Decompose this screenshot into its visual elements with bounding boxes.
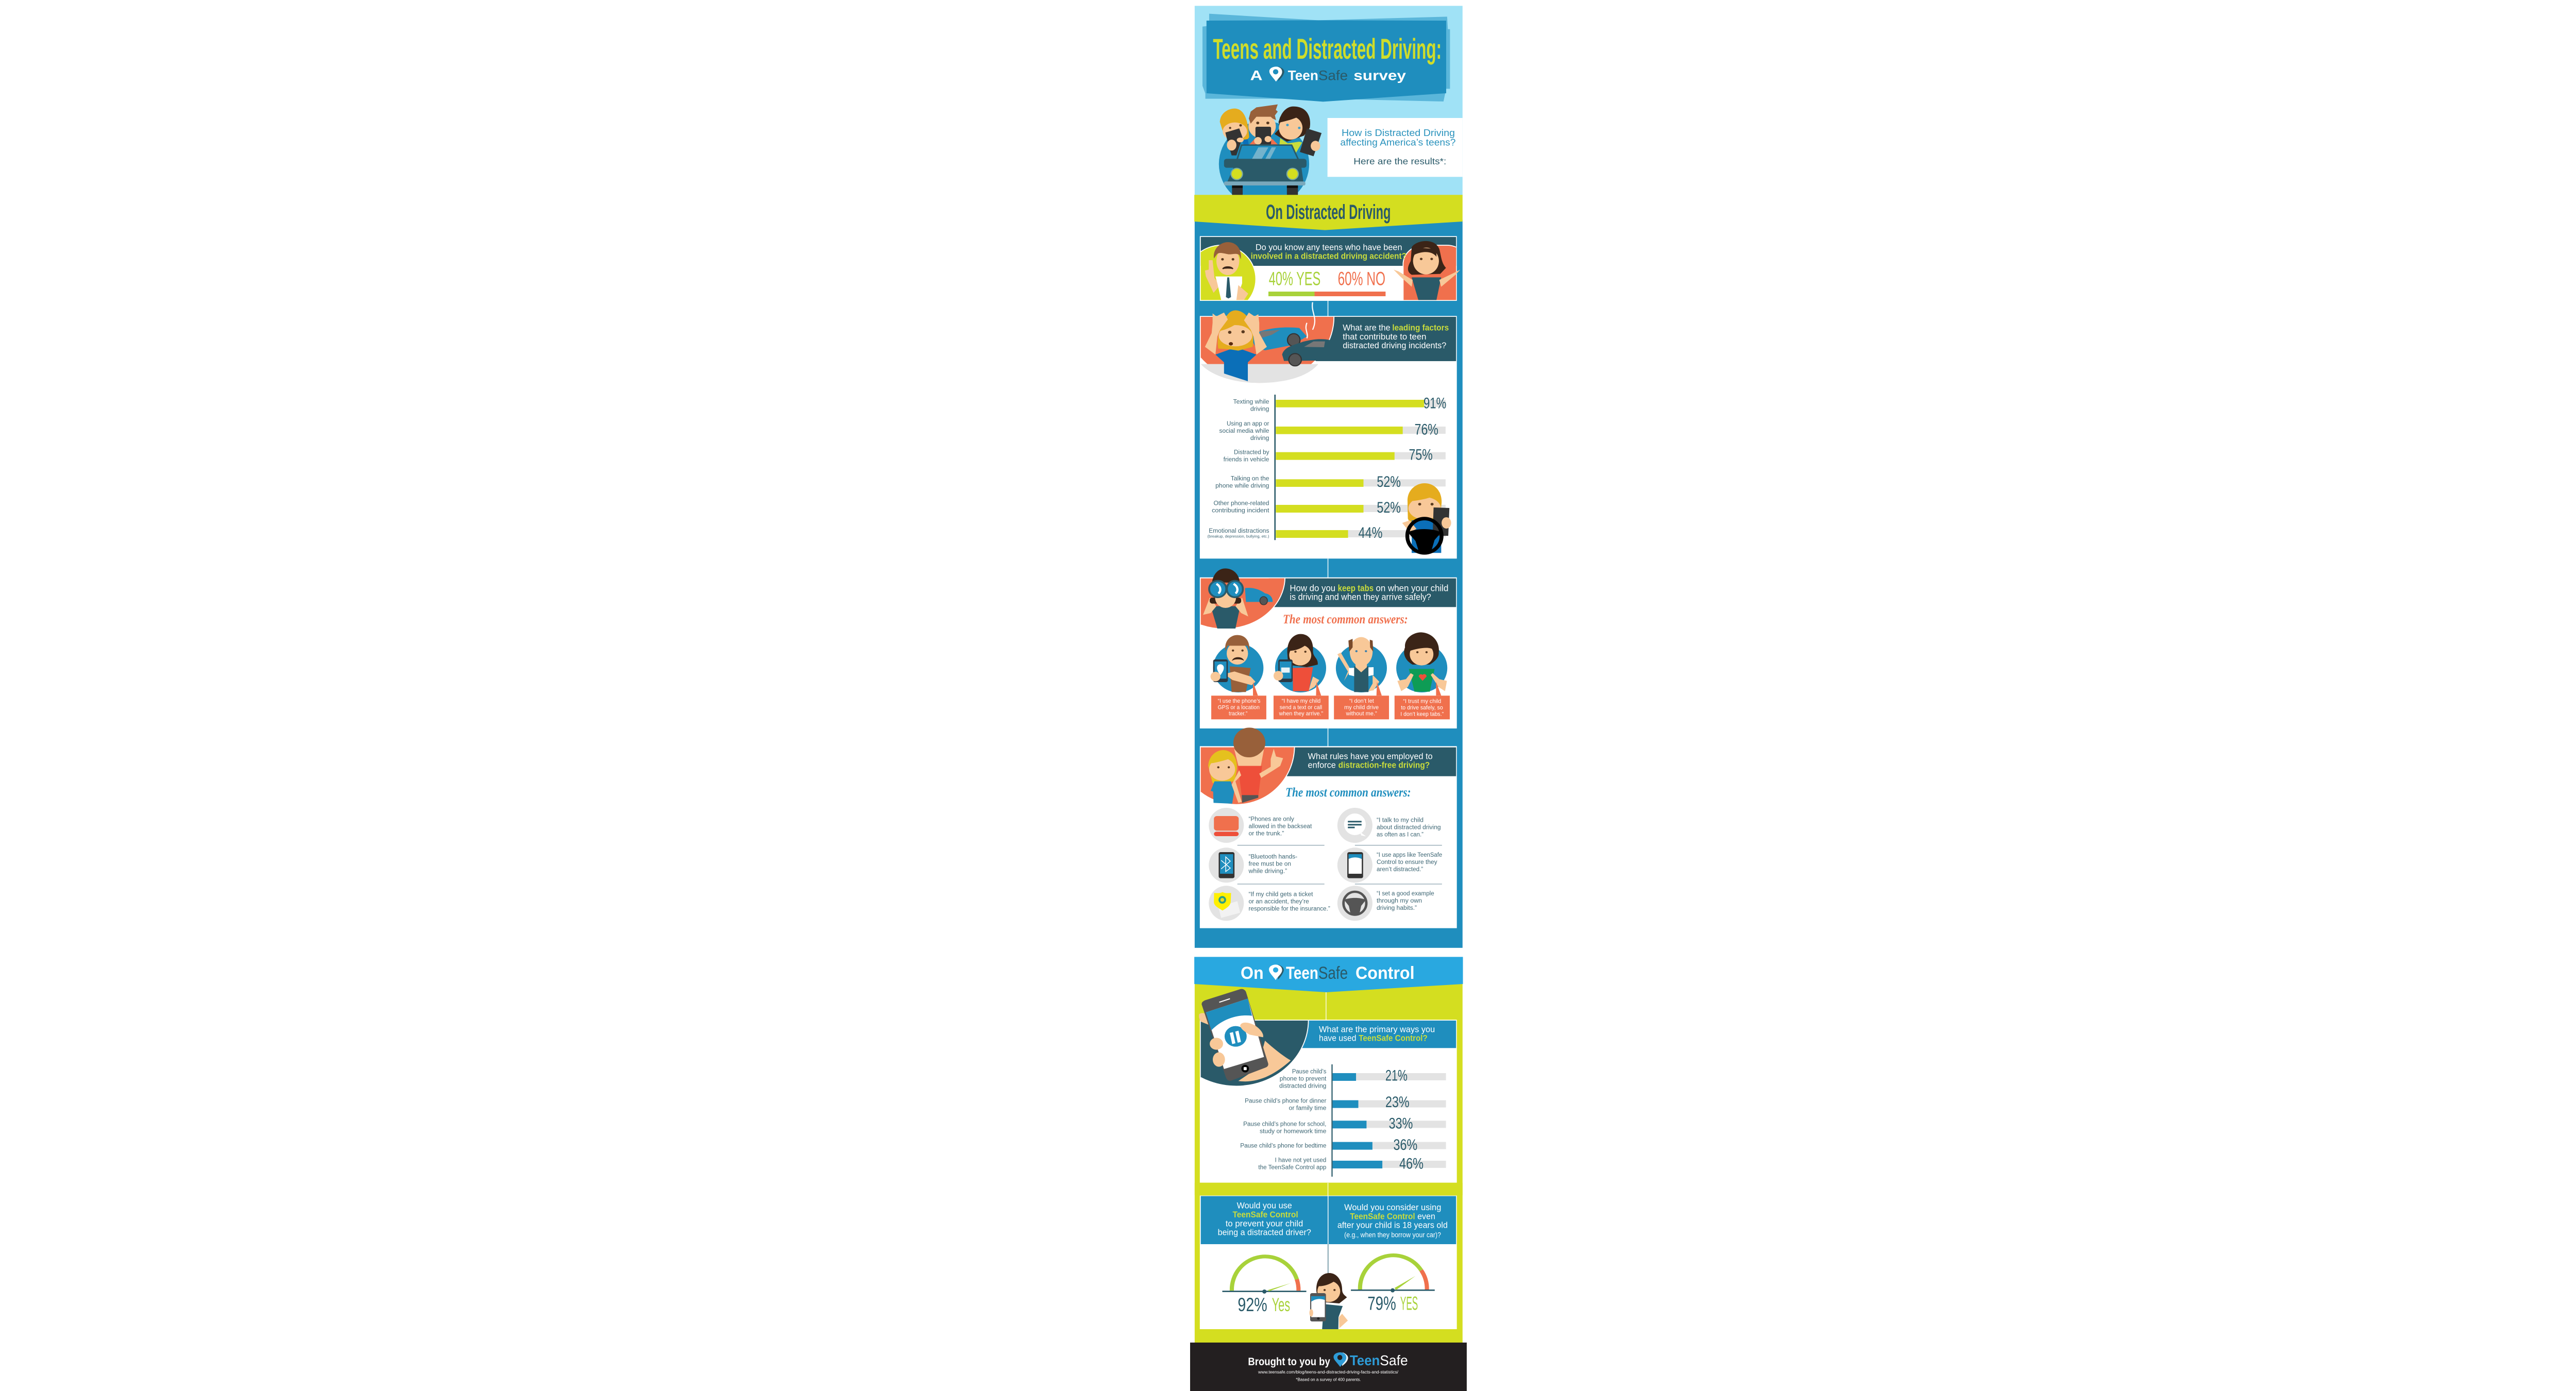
bar: other phone 52%: 52% — [1377, 499, 1401, 516]
bar: bedtime 36%: 36% — [1394, 1136, 1417, 1153]
bar: other phone 52% — [1276, 499, 1446, 516]
section heading: On TeenSafe Control: Teen — [1286, 963, 1318, 983]
answer: text or call: send a text or call — [1280, 704, 1322, 710]
bar labels: Pause child’s phone for school, — [1243, 1121, 1326, 1127]
subtitle: A TeenSafe survey: A — [1250, 68, 1263, 83]
bar labels: Pause child’s — [1292, 1068, 1326, 1075]
question text: distraction-free driving? — [1338, 760, 1430, 770]
bar: texting 91% — [1276, 395, 1446, 412]
footer: Brought to you by — [1248, 1355, 1330, 1368]
rule: TeenSafe apps — [1337, 847, 1442, 883]
rule: TeenSafe apps: aren’t distracted.” — [1377, 866, 1423, 873]
panel: known accident question — [1199, 236, 1460, 301]
bar labels: Texting while — [1233, 398, 1269, 405]
section heading: On TeenSafe Control: Safe — [1318, 963, 1348, 983]
bar: talking 52% — [1276, 473, 1446, 490]
bar labels: distracted driving — [1279, 1082, 1327, 1089]
rule: set a good example — [1337, 886, 1434, 921]
question text: TeenSafe Control? — [1359, 1033, 1428, 1043]
rule: set a good example: driving habits.” — [1377, 905, 1417, 911]
footer: Safe — [1380, 1352, 1408, 1369]
gauge: 79% yes — [1351, 1256, 1435, 1314]
gauge: 79% yes: YES — [1400, 1293, 1418, 1314]
illustration: shrugging woman — [1394, 241, 1460, 300]
answer: text or call: when they arrive.” — [1279, 710, 1323, 717]
illustration: woman with phone — [1309, 1273, 1348, 1329]
rule: bluetooth: “Bluetooth hands- — [1249, 853, 1297, 860]
bar labels: Pause child’s phone for bedtime — [1240, 1142, 1327, 1149]
bar labels: phone to prevent — [1280, 1075, 1327, 1082]
bar: friends 75%: 75% — [1409, 446, 1433, 463]
yes and no result: 40% YES — [1269, 268, 1320, 290]
title: Teens and Distracted Driving: — [1213, 32, 1442, 65]
question text: distracted driving incidents? — [1343, 341, 1447, 350]
question text — [1251, 243, 1406, 261]
header background — [1195, 6, 1463, 196]
bar: school 33% — [1333, 1115, 1446, 1132]
illustration: man with raised finger — [1200, 242, 1256, 300]
question text: leading factors — [1392, 323, 1449, 332]
bar: distracted driving 21% — [1333, 1067, 1446, 1084]
illustration: hand holding phone on pause screen — [1164, 954, 1309, 1086]
bar: bedtime 36% — [1333, 1136, 1446, 1153]
lime background — [1195, 982, 1463, 1195]
subtitle: A TeenSafe survey — [1250, 66, 1406, 83]
answer: trust child: to drive safely, so — [1401, 705, 1443, 711]
question text — [1319, 1024, 1435, 1043]
bar: apps 76% — [1276, 421, 1446, 438]
rule: talk to child: as often as I can.” — [1377, 831, 1423, 838]
bar: friends 75% — [1276, 446, 1446, 463]
question right — [1337, 1202, 1448, 1239]
rule: set a good example: through my own — [1377, 897, 1422, 904]
answer: trust child: I don’t keep tabs.” — [1400, 711, 1444, 717]
question text — [1290, 583, 1448, 602]
rule: ticket and insurance: responsible for the insurance.” — [1249, 905, 1330, 912]
script heading: The most common answers: — [1285, 785, 1411, 800]
question text: What rules have you employed to — [1308, 751, 1433, 761]
bar labels: Other phone-related — [1213, 500, 1269, 506]
answer: GPS tracker: GPS or a location — [1218, 704, 1260, 710]
bar: dinner 23% — [1333, 1093, 1446, 1111]
bar labels: Using an app or — [1227, 420, 1269, 427]
footer: www.teensafe.com/blog/teens-and-distracted-driving-facts-and-statistics/ — [1258, 1369, 1399, 1375]
question text: Do you know any teens who have been — [1256, 243, 1402, 252]
rule: TeenSafe apps: “I use apps like TeenSafe — [1377, 852, 1442, 858]
bar labels — [1208, 398, 1269, 539]
section heading: On TeenSafe Control: On — [1241, 963, 1264, 983]
question text: involved in a distracted driving accident? — [1251, 251, 1406, 261]
question text: What are the — [1343, 323, 1391, 332]
illustration: three teens in a car on phones — [1219, 105, 1321, 207]
rule: talk to child: about distracted driving — [1377, 824, 1441, 830]
answer: do not let child drive — [1334, 637, 1389, 719]
illustration: parent and daughter — [1178, 688, 1295, 805]
question sections — [1184, 236, 1468, 558]
bar: emotional 44%: 44% — [1359, 524, 1382, 541]
bar labels: Emotional distractions — [1209, 528, 1269, 534]
bar: dinner 23%: 23% — [1385, 1093, 1410, 1111]
answer: trust child: “I trust my child — [1403, 698, 1441, 704]
script heading: The most common answers: — [1283, 612, 1408, 626]
bar labels: driving — [1250, 405, 1269, 412]
bar labels — [1240, 1068, 1327, 1171]
bar chart: leading factors — [1208, 395, 1446, 541]
panel: rules — [1178, 688, 1457, 928]
illustration: girl texting at the wheel — [1402, 483, 1451, 553]
question text: enforce — [1308, 760, 1336, 770]
question text: is driving and when they arrive safely? — [1290, 592, 1431, 602]
question right: Would you consider using — [1344, 1202, 1441, 1212]
panel: primary ways used — [1164, 954, 1457, 1183]
bar: distracted driving 21%: 21% — [1385, 1067, 1408, 1084]
answer: do not let child drive: without me.” — [1346, 710, 1377, 717]
intro white box: affecting America’s teens? — [1340, 138, 1456, 148]
illustration: woman with binoculars — [1163, 525, 1285, 629]
bar labels: social media while — [1219, 428, 1269, 434]
question text: have used — [1319, 1033, 1356, 1043]
bar: talking 52%: 52% — [1377, 473, 1401, 490]
bar labels: the TeenSafe Control app — [1258, 1164, 1327, 1171]
rule: talk to child — [1337, 808, 1441, 843]
bar: not used 46% — [1333, 1155, 1446, 1172]
rule: bluetooth: free must be on — [1249, 860, 1291, 867]
TeenSafe Control section — [1164, 954, 1463, 1195]
rule: phones in backseat — [1209, 808, 1312, 843]
illustration: crash and worried woman — [1184, 250, 1334, 383]
final questions and footer section — [1190, 1183, 1467, 1391]
rule: phones in backseat: “Phones are only — [1249, 816, 1295, 822]
question left — [1218, 1201, 1311, 1237]
footer: *Based on a survey of 400 parents. — [1296, 1377, 1361, 1382]
subtitle: A TeenSafe survey: survey — [1353, 68, 1406, 83]
section heading band: On Distracted Driving — [1194, 195, 1463, 230]
bar labels: Pause child’s phone for dinner — [1245, 1097, 1326, 1104]
question right: TeenSafe Control — [1350, 1211, 1415, 1221]
question text: keep tabs — [1338, 583, 1374, 593]
bar labels: or family time — [1289, 1105, 1327, 1111]
answer: do not let child drive: my child drive — [1344, 704, 1379, 710]
rule: phones in backseat: allowed in the backseat — [1249, 823, 1312, 829]
bar labels: I have not yet used — [1275, 1157, 1327, 1163]
answer: text or call: “I have my child — [1282, 698, 1320, 704]
bar: not used 46%: 46% — [1399, 1155, 1423, 1172]
bar labels: driving — [1250, 435, 1269, 442]
rule: talk to child: “I talk to my child — [1377, 817, 1423, 823]
bar: emotional 44% — [1276, 524, 1446, 541]
intro white box: Here are the results*: — [1353, 157, 1446, 167]
subtitle: A TeenSafe survey: Safe — [1318, 68, 1348, 83]
header section — [1194, 6, 1463, 948]
answer: do not let child drive: “I don’t let — [1349, 698, 1375, 704]
bar labels: Distracted by — [1234, 449, 1269, 455]
rule: set a good example: “I set a good example — [1377, 890, 1434, 897]
question text — [1308, 751, 1433, 770]
gauge: 79% yes: 79% — [1367, 1293, 1396, 1314]
infographic: teens and distracted driving — [1190, 6, 1467, 1391]
bar: texting 91%: 91% — [1423, 395, 1446, 412]
footer — [1190, 1343, 1467, 1391]
rule: bluetooth — [1209, 847, 1297, 883]
question left: Would you use — [1237, 1201, 1292, 1210]
panel: would you use — [1200, 1196, 1457, 1329]
subtitle: A TeenSafe survey: Teen — [1288, 68, 1318, 83]
panel: leading factors — [1184, 250, 1457, 558]
question right: even — [1417, 1211, 1435, 1221]
section heading: On TeenSafe Control — [1194, 957, 1463, 992]
section heading band: On Distracted Driving: On Distracted Driving — [1266, 200, 1391, 223]
question text: How do you — [1290, 583, 1335, 593]
yes and no result: 60% NO — [1338, 268, 1385, 290]
answer: GPS tracker — [1211, 635, 1266, 719]
answer: GPS tracker: “I use the phone’s — [1218, 698, 1261, 704]
bar labels: contributing incident — [1212, 507, 1269, 514]
bar labels: Talking on the — [1231, 475, 1269, 482]
rule: ticket and insurance — [1209, 886, 1330, 921]
lime background — [1195, 1183, 1463, 1344]
question left: to prevent your child — [1226, 1218, 1303, 1228]
rule: TeenSafe apps: Control to ensure they — [1377, 859, 1437, 866]
bar chart: uses of TeenSafe Control — [1240, 1064, 1446, 1177]
intro white box — [1328, 118, 1463, 177]
bar: apps 76%: 76% — [1415, 421, 1438, 438]
question text: What are the primary ways you — [1319, 1024, 1435, 1034]
icon: TeenSafe pin — [1333, 1352, 1348, 1367]
panel: keeping tabs — [1163, 525, 1457, 728]
question right: (e.g., when they borrow your car)? — [1344, 1231, 1441, 1239]
rules section — [1178, 688, 1457, 928]
gauge: 92% yes — [1222, 1257, 1307, 1315]
keep tabs section — [1163, 525, 1457, 748]
rule: phones in backseat: or the trunk.” — [1249, 830, 1284, 837]
gauge: 92% yes: Yes — [1272, 1294, 1290, 1315]
question text — [1343, 323, 1449, 350]
rule: bluetooth: while driving.” — [1248, 868, 1287, 874]
blue panel background — [1195, 220, 1463, 948]
intro white box: How is Distracted Driving — [1342, 128, 1455, 139]
bar labels: study or homework time — [1260, 1128, 1327, 1134]
rule: ticket and insurance: “If my child gets a ticket — [1249, 891, 1313, 897]
section heading: On TeenSafe Control: Control — [1355, 963, 1415, 983]
bar labels: (breakup, depression, bullying, etc.) — [1208, 534, 1269, 539]
question text: that contribute to teen — [1343, 332, 1427, 342]
question left: TeenSafe Control — [1232, 1210, 1298, 1219]
rule: ticket and insurance: or an accident, they’re — [1249, 898, 1309, 905]
bar labels: friends in vehicle — [1224, 456, 1269, 463]
question left: being a distracted driver? — [1218, 1228, 1311, 1237]
bar chart section — [1208, 395, 1451, 578]
question text: on when your child — [1376, 583, 1448, 593]
gauge: 92% yes: 92% — [1238, 1294, 1267, 1315]
footer: Teen — [1350, 1352, 1380, 1369]
yes and no result — [1268, 268, 1385, 296]
answer: GPS tracker: tracker.” — [1229, 710, 1247, 717]
bar: school 33%: 33% — [1389, 1115, 1413, 1132]
answer: trust child — [1395, 632, 1450, 719]
answer: text or call — [1274, 634, 1329, 719]
question right: after your child is 18 years old — [1337, 1220, 1448, 1230]
title banner — [1202, 14, 1450, 101]
bar labels: phone while driving — [1215, 482, 1269, 489]
